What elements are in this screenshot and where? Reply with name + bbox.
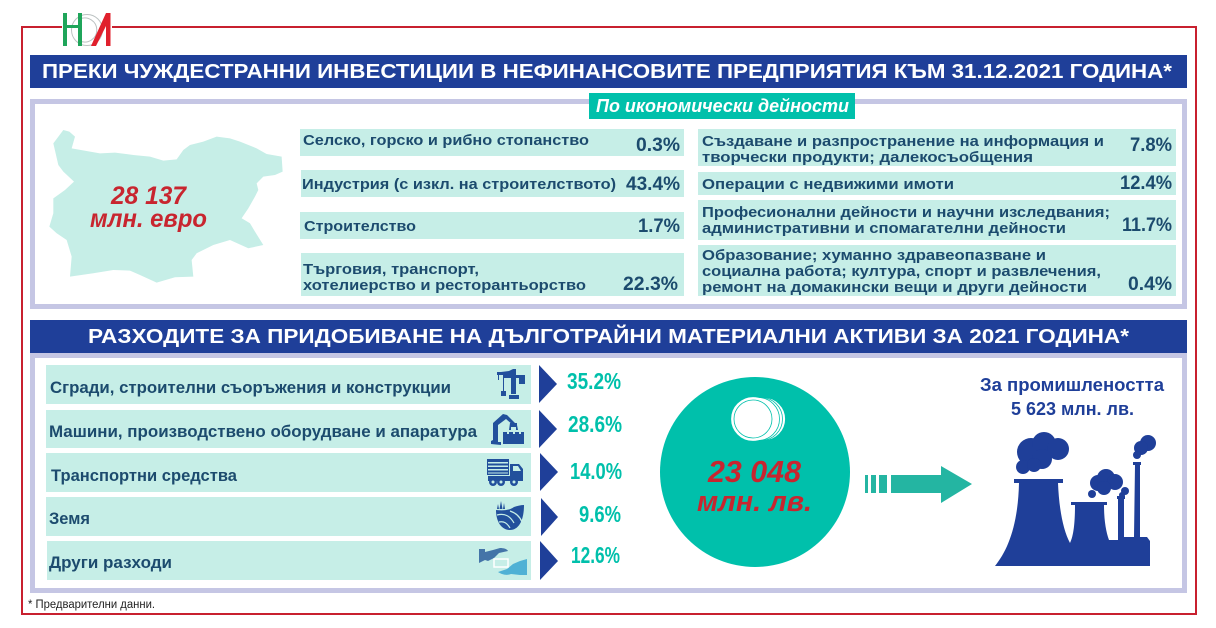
row: education and other: Образование; хуманно здравеопазване и: [702, 248, 1046, 264]
circle with total: [660, 377, 850, 567]
row: trade: 22.3%: [623, 274, 678, 295]
row: vehicles: 14.0%: [570, 458, 622, 484]
map of Bulgaria with total: [49, 130, 283, 283]
title bar: expenditure on fixed assets: [30, 320, 1187, 353]
row: trade: [301, 253, 684, 296]
arrow: [865, 466, 972, 503]
row: real estate: [698, 172, 1176, 195]
row: trade: Търговия, транспорт,: [303, 262, 479, 278]
row: information: творчески продукти; далекосъобщения: [702, 150, 1033, 166]
row: construction: Строителство: [304, 219, 416, 235]
pointer: [539, 365, 557, 403]
title bar: foreign investments: [30, 55, 1187, 88]
row: construction: [300, 212, 684, 239]
icon: hands: [479, 548, 527, 575]
icon: robot arm: [491, 414, 524, 445]
map of Bulgaria with total: млн. евро: [90, 205, 207, 233]
row: industry: 43.4%: [626, 174, 680, 195]
industry text: [980, 375, 1165, 419]
row: real estate: 12.4%: [1120, 173, 1172, 194]
icon: factory: [995, 432, 1156, 566]
icon: field: [496, 501, 524, 530]
title bar: foreign investments: ПРЕКИ ЧУЖДЕСТРАННИ ИНВЕСТИЦИИ В НЕФИНАНСОВИТЕ ПРЕДПРИЯТИЯ КЪМ 31.12.2021 ГОДИНА*: [42, 61, 1172, 83]
row: professional activities: 11.7%: [1122, 215, 1172, 236]
row: agriculture: [300, 129, 684, 156]
row: land: [46, 497, 621, 536]
row: vehicles: [46, 453, 622, 492]
circle with total: млн. лв.: [697, 486, 812, 518]
row: agriculture: Селско, горско и рибно стопанство: [303, 133, 589, 149]
row: machines: [46, 410, 622, 448]
row: professional activities: [698, 200, 1176, 240]
row: trade: хотелиерство и ресторантьорство: [303, 278, 586, 294]
row: buildings: [46, 365, 621, 404]
heading: by economic activity: По икономически дейности: [596, 96, 849, 116]
row: land: Земя: [49, 509, 90, 528]
row: other expenses: 12.6%: [571, 542, 620, 568]
row: buildings: 35.2%: [567, 368, 621, 394]
row: real estate: Операции с недвижими имоти: [702, 177, 954, 193]
row: land: 9.6%: [579, 501, 621, 527]
title bar: expenditure on fixed assets: РАЗХОДИТЕ ЗА ПРИДОБИВАНЕ НА ДЪЛГОТРАЙНИ МАТЕРИАЛНИ АКТИВИ ЗА 2021 ГОДИНА*: [88, 324, 1129, 348]
row: other expenses: [47, 541, 620, 580]
circle with total: 23 048: [707, 454, 802, 489]
row: agriculture: 0.3%: [636, 135, 680, 156]
logo: [63, 13, 110, 46]
row: professional activities: Професионални дейности и научни изследвания;: [702, 205, 1110, 221]
footnote: * Предварителни данни.: [28, 599, 155, 611]
industry text: За промишлеността: [980, 375, 1165, 395]
panel: investments by economic activity: [32, 93, 1184, 306]
row: construction: 1.7%: [638, 216, 680, 237]
row: other expenses: Други разходи: [49, 553, 172, 572]
row: machines: 28.6%: [568, 411, 622, 437]
row: education and other: ремонт на домакински вещи и други дейности: [702, 280, 1087, 296]
pointer: [540, 541, 558, 580]
panel: expenditure: [32, 356, 1184, 590]
row: information: 7.8%: [1130, 135, 1172, 156]
row: industry: [301, 170, 684, 197]
row: buildings: Сгради, строителни съоръжения и конструкции: [50, 378, 451, 397]
icon: coin stack: [732, 398, 786, 440]
row: industry: Индустрия (с изкл. на строителството): [302, 177, 616, 193]
industry text: 5 623 млн. лв.: [1011, 399, 1134, 419]
row: professional activities: административни и спомагателни дейности: [702, 221, 1066, 237]
row: information: [698, 129, 1176, 166]
pointer: [540, 453, 558, 491]
row: vehicles: Транспортни средства: [51, 466, 238, 485]
row: education and other: социална работа; култура, спорт и развлечения,: [702, 264, 1101, 280]
map of Bulgaria with total: 28 137: [110, 182, 187, 210]
icon: crane: [497, 369, 525, 399]
icon: truck: [487, 459, 523, 486]
row: education and other: [698, 245, 1176, 296]
row: information: Създаване и разпространение на информация и: [702, 134, 1104, 150]
row: education and other: 0.4%: [1128, 274, 1172, 295]
pointer: [539, 410, 557, 448]
pointer: [541, 498, 558, 536]
row: machines: Машини, производствено оборудване и апаратура: [49, 422, 478, 441]
